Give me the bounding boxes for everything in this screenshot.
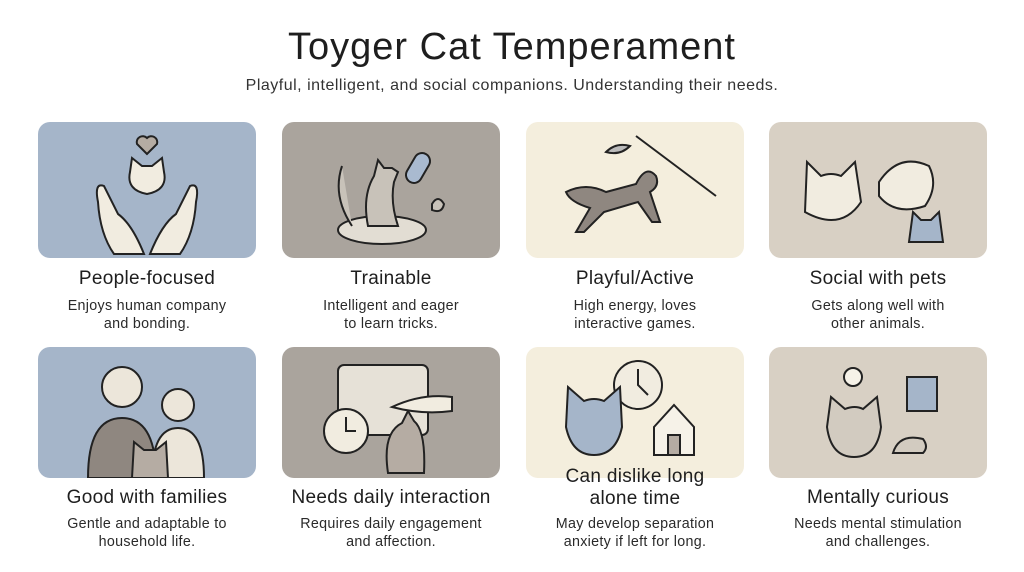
panel: trainable bbox=[282, 122, 500, 258]
text: social bbox=[811, 298, 945, 332]
text: families bbox=[67, 516, 227, 550]
text: trainable: to learn tricks. bbox=[344, 316, 438, 332]
text: people-focused bbox=[68, 298, 226, 332]
title: Toyger Cat Temperament bbox=[288, 26, 736, 68]
text: alone time bbox=[556, 516, 714, 550]
panel: families bbox=[38, 347, 256, 478]
panel: curious bbox=[769, 347, 987, 478]
panel: daily interaction bbox=[282, 347, 500, 478]
text: playful: High energy, loves bbox=[574, 298, 696, 314]
text: playful bbox=[574, 298, 696, 332]
heading: daily interaction: Needs daily interaction bbox=[291, 487, 491, 508]
heading: social: Social with pets bbox=[810, 268, 946, 289]
heading: curious: Mentally curious bbox=[807, 487, 949, 508]
text: trainable bbox=[323, 298, 459, 332]
heading: trainable: Trainable bbox=[350, 268, 432, 289]
heading: playful: Playful/Active bbox=[576, 268, 694, 289]
heading: people-focused: People-focused bbox=[79, 268, 215, 289]
text: daily interaction bbox=[300, 516, 482, 550]
text: curious bbox=[794, 516, 962, 550]
text: social: other animals. bbox=[831, 316, 925, 332]
text: curious: and challenges. bbox=[826, 534, 930, 550]
text: alone time: anxiety if left for long. bbox=[564, 534, 706, 550]
text: families: household life. bbox=[99, 534, 195, 550]
panel: playful bbox=[526, 122, 744, 258]
text: families: Gentle and adaptable to bbox=[67, 516, 227, 532]
panel: people-focused bbox=[38, 122, 256, 258]
text: people-focused: and bonding. bbox=[104, 316, 190, 332]
heading: alone time: Can dislike long bbox=[566, 466, 704, 487]
text: daily interaction: Requires daily engagement bbox=[300, 516, 482, 532]
text: curious: Needs mental stimulation bbox=[794, 516, 962, 532]
panel: social bbox=[769, 122, 987, 258]
text: people-focused: Enjoys human company bbox=[68, 298, 226, 314]
text: playful: interactive games. bbox=[574, 316, 696, 332]
text: daily interaction: and affection. bbox=[346, 534, 436, 550]
heading: alone time: alone time bbox=[590, 488, 680, 509]
heading: families: Good with families bbox=[67, 487, 227, 508]
text: social: Gets along well with bbox=[811, 298, 945, 314]
heading: alone time bbox=[566, 466, 704, 509]
text: alone time: May develop separation bbox=[556, 516, 714, 532]
panel: alone time bbox=[526, 347, 744, 478]
subtitle: Playful, intelligent, and social companions. Understanding their needs. bbox=[246, 77, 778, 94]
text: trainable: Intelligent and eager bbox=[323, 298, 459, 314]
